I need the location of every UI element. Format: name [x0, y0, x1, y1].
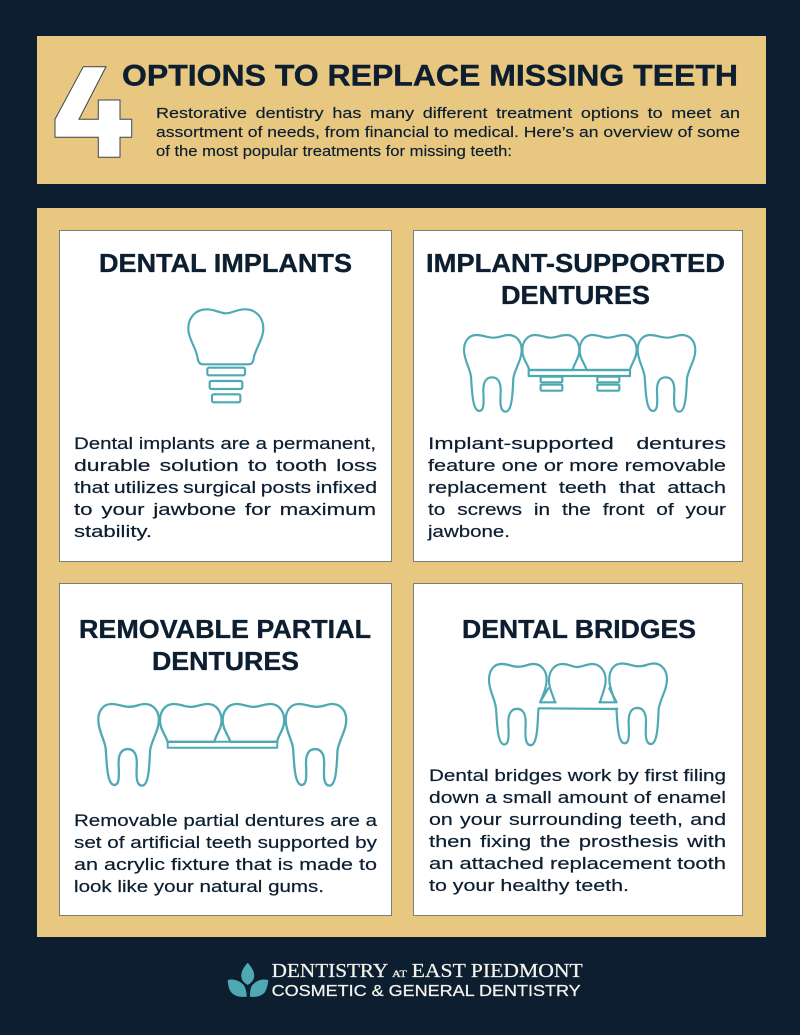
text: implant-supported dentures: jawbone. — [427, 522, 510, 541]
logo — [228, 960, 583, 1000]
text: dental bridges: an attached replacement tooth — [429, 854, 726, 873]
text: dental bridges: then fixing the prosthesis with — [429, 832, 726, 851]
intro text: assortment of needs, from financial to medical. Here’s an overview of some — [156, 125, 740, 141]
text: dental bridges: to your healthy teeth. — [429, 876, 629, 895]
icon: leaves — [228, 963, 268, 997]
logo tagline: COSMETIC & GENERAL DENTISTRY — [272, 983, 581, 1000]
text: removable partial dentures — [74, 811, 378, 896]
text: dental implants: Dental implants are a permanent, — [74, 434, 376, 453]
icon: removable partial dentures — [98, 704, 346, 786]
icon: dental bridge — [489, 663, 667, 745]
panel: dental implants — [60, 230, 392, 562]
logo name: DENTISTRY — [272, 960, 388, 982]
text: dental implants: to your jawbone for maximum — [74, 500, 376, 519]
heading: implant-supported dentures: IMPLANT-SUPPORTED — [426, 248, 725, 278]
icon: implant-supported dentures — [464, 335, 695, 412]
heading: dental bridges: DENTAL BRIDGES — [462, 614, 696, 644]
text: dental implants: that utilizes surgical posts infixed — [74, 478, 377, 497]
heading: implant-supported dentures — [426, 248, 725, 310]
main panel — [37, 208, 766, 937]
text: dental implants — [74, 434, 377, 541]
text: removable partial dentures: set of artificial teeth supported by — [74, 833, 378, 852]
text: dental implants: durable solution to tooth loss — [74, 456, 377, 475]
logo name: AT — [392, 969, 408, 979]
intro text: of the most popular treatments for missing teeth: — [156, 144, 512, 160]
heading: implant-supported dentures: DENTURES — [501, 280, 650, 310]
text: implant-supported dentures: feature one or more removable — [428, 456, 726, 475]
panel: removable partial dentures — [60, 584, 392, 916]
heading: removable partial dentures: DENTURES — [152, 646, 299, 676]
panel: dental bridges — [414, 584, 742, 916]
text: implant-supported dentures: to screws in the front of your — [428, 500, 726, 519]
text: dental bridges: on your surrounding teeth, and — [429, 810, 726, 829]
heading: removable partial dentures: REMOVABLE PARTIAL — [79, 614, 371, 644]
text: dental implants: stability. — [74, 522, 152, 541]
heading: removable partial dentures — [79, 614, 371, 676]
text: dental bridges: Dental bridges work by first filing — [429, 766, 726, 785]
title: OPTIONS TO REPLACE MISSING TEETH — [122, 60, 738, 92]
text: dental bridges — [429, 766, 726, 895]
text: implant-supported dentures: replacement teeth that attach — [428, 478, 726, 497]
header panel — [37, 36, 766, 184]
text: implant-supported dentures — [427, 434, 726, 541]
intro text — [156, 106, 740, 160]
icon: dental implant — [188, 309, 263, 402]
panel: implant-supported dentures — [414, 230, 742, 562]
text: removable partial dentures: look like your natural gums. — [74, 877, 324, 896]
text: removable partial dentures: Removable partial dentures are a — [74, 811, 378, 830]
heading: dental implants: DENTAL IMPLANTS — [99, 248, 352, 278]
intro text: Restorative dentistry has many different treatment options to meet an — [156, 106, 740, 122]
text: implant-supported dentures: Implant-supported dentures — [428, 434, 726, 453]
text: dental bridges: down a small amount of enamel — [429, 788, 726, 807]
logo name: EAST PIEDMONT — [412, 960, 583, 982]
text: removable partial dentures: an acrylic fixture that is made to — [74, 855, 377, 874]
big number 4 — [55, 67, 132, 157]
